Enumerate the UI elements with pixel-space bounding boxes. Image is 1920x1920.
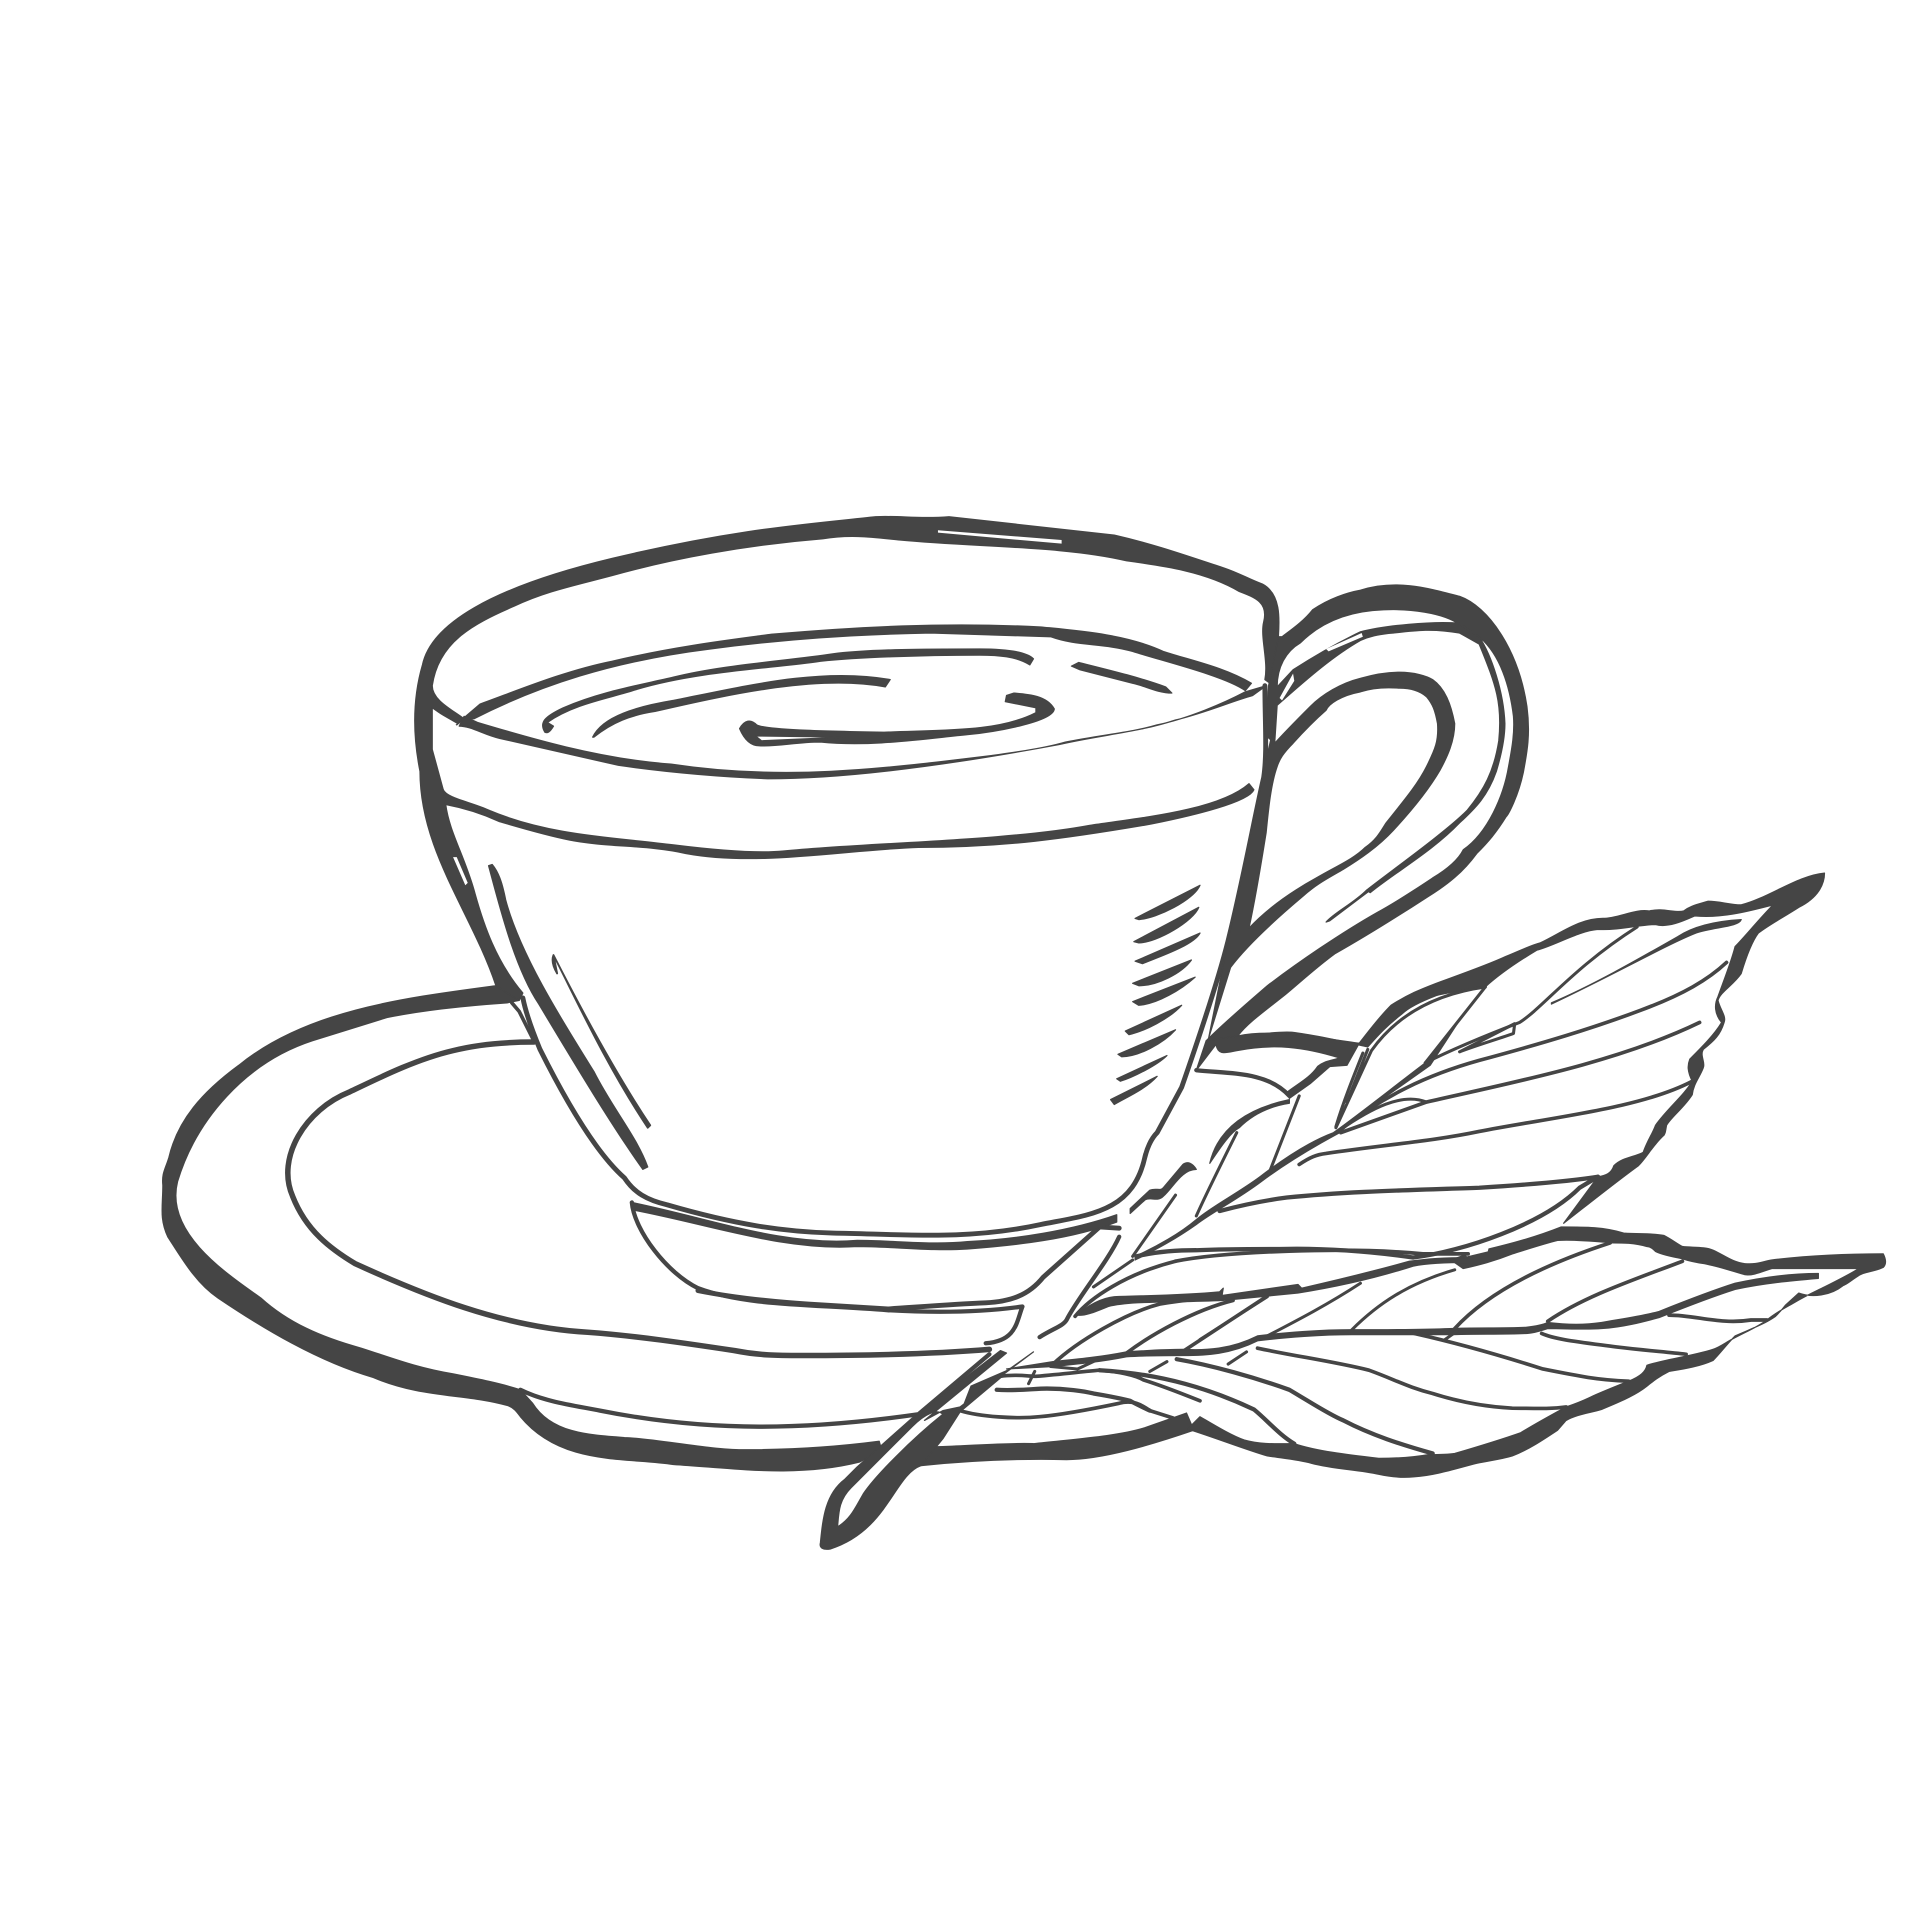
curved line from cup xyxy=(1075,1261,1176,1316)
saucer inner corner xyxy=(512,1003,534,1041)
cup left wall and bottom xyxy=(523,686,1266,1235)
saucer outer rim xyxy=(162,986,882,1471)
vein to midrib 1 xyxy=(1267,1283,1360,1336)
coffee front edge xyxy=(459,686,1266,779)
left wall highlight long xyxy=(489,864,648,1169)
lower vein one xyxy=(1542,1333,1686,1354)
small notch sliver xyxy=(1464,1247,1489,1256)
inner triangle of rim xyxy=(433,710,457,748)
saucer right bottom edge xyxy=(912,1413,1194,1466)
lower vein five xyxy=(1100,1370,1294,1444)
thin line by cup xyxy=(1133,1195,1176,1256)
thin stroke by B xyxy=(1093,1260,1133,1287)
branch thick xyxy=(1551,920,1741,1004)
small sliver xyxy=(1460,1024,1515,1052)
midrib branch xyxy=(1425,987,1485,1063)
toothed vein xyxy=(1078,1258,1468,1315)
vein one xyxy=(1340,962,1727,1130)
top vein xyxy=(1176,1250,1468,1261)
small leaf piece xyxy=(1051,1360,1096,1369)
ventral line C xyxy=(1053,1298,1224,1364)
saucer inner well xyxy=(288,1042,989,1356)
cup foot ring xyxy=(632,1202,1022,1343)
near-stem strokes xyxy=(960,1402,1173,1418)
swirl stroke three xyxy=(740,693,1054,746)
ticks xyxy=(1029,1331,1457,1384)
handle xyxy=(1206,585,1528,1041)
leaf bottom edge xyxy=(1136,1177,1598,1258)
shading hatch marks xyxy=(1111,885,1200,1104)
vein to midrib 4 xyxy=(1548,1261,1682,1321)
dish line under cup xyxy=(632,1202,1117,1250)
saucer front lip xyxy=(520,1354,989,1427)
left wall highlight short xyxy=(552,955,650,1128)
vein to midrib 3 xyxy=(1455,1243,1610,1329)
lower vein three xyxy=(1258,1348,1566,1408)
lower leaf xyxy=(960,1227,1886,1477)
squiggle by cup xyxy=(1130,1163,1196,1213)
lobe line two xyxy=(1269,1096,1299,1174)
vein two xyxy=(1341,1022,1700,1133)
small fork xyxy=(1669,1315,1767,1321)
swirl stroke one xyxy=(543,649,1033,733)
lower rim band xyxy=(443,784,1254,859)
upper leaf outline xyxy=(1238,873,1824,1223)
main midrib xyxy=(1135,1020,1460,1260)
coffee surface top band xyxy=(463,625,1251,719)
lower vein two xyxy=(1414,1333,1629,1381)
vein four xyxy=(1220,1177,1598,1211)
long stroke B xyxy=(1040,1237,1119,1337)
thin leaf arc xyxy=(1336,987,1485,1128)
upper leaf veins xyxy=(1340,1099,1427,1130)
cup highlight slivers xyxy=(453,530,1062,885)
midrib xyxy=(1007,1273,1818,1369)
handle outer band xyxy=(1206,585,1528,1041)
lobe line three xyxy=(1336,1053,1363,1127)
cup side stroke xyxy=(1196,1070,1289,1096)
upper leaf xyxy=(1130,873,1824,1260)
swirl stroke two xyxy=(593,676,890,737)
lobe lines xyxy=(1196,1133,1237,1216)
saucer xyxy=(162,986,1194,1549)
lobe thick curve xyxy=(1210,1100,1289,1163)
cup rim outer band xyxy=(415,516,1279,1000)
short stroke under stem xyxy=(997,1389,1150,1411)
lower vein four xyxy=(1177,1359,1433,1453)
branch to top edge xyxy=(1425,927,1637,1063)
stem of leaves xyxy=(820,1351,1033,1549)
branching veins xyxy=(1200,1297,1267,1340)
foot ring inner curve xyxy=(698,1227,1119,1309)
long curve over stem xyxy=(962,1370,1200,1408)
right foam dash xyxy=(1071,662,1172,693)
handle inner loop ring xyxy=(1209,672,1455,1038)
handle sliver xyxy=(1280,633,1363,700)
lower leaf outline xyxy=(1188,1227,1886,1477)
thick stem to cup xyxy=(1196,1033,1359,1098)
vein to midrib 2 xyxy=(1352,1270,1455,1330)
cup xyxy=(415,516,1279,1250)
handle lower tail xyxy=(1326,890,1370,922)
vein D xyxy=(1127,1297,1266,1353)
vein three xyxy=(1299,1081,1692,1164)
